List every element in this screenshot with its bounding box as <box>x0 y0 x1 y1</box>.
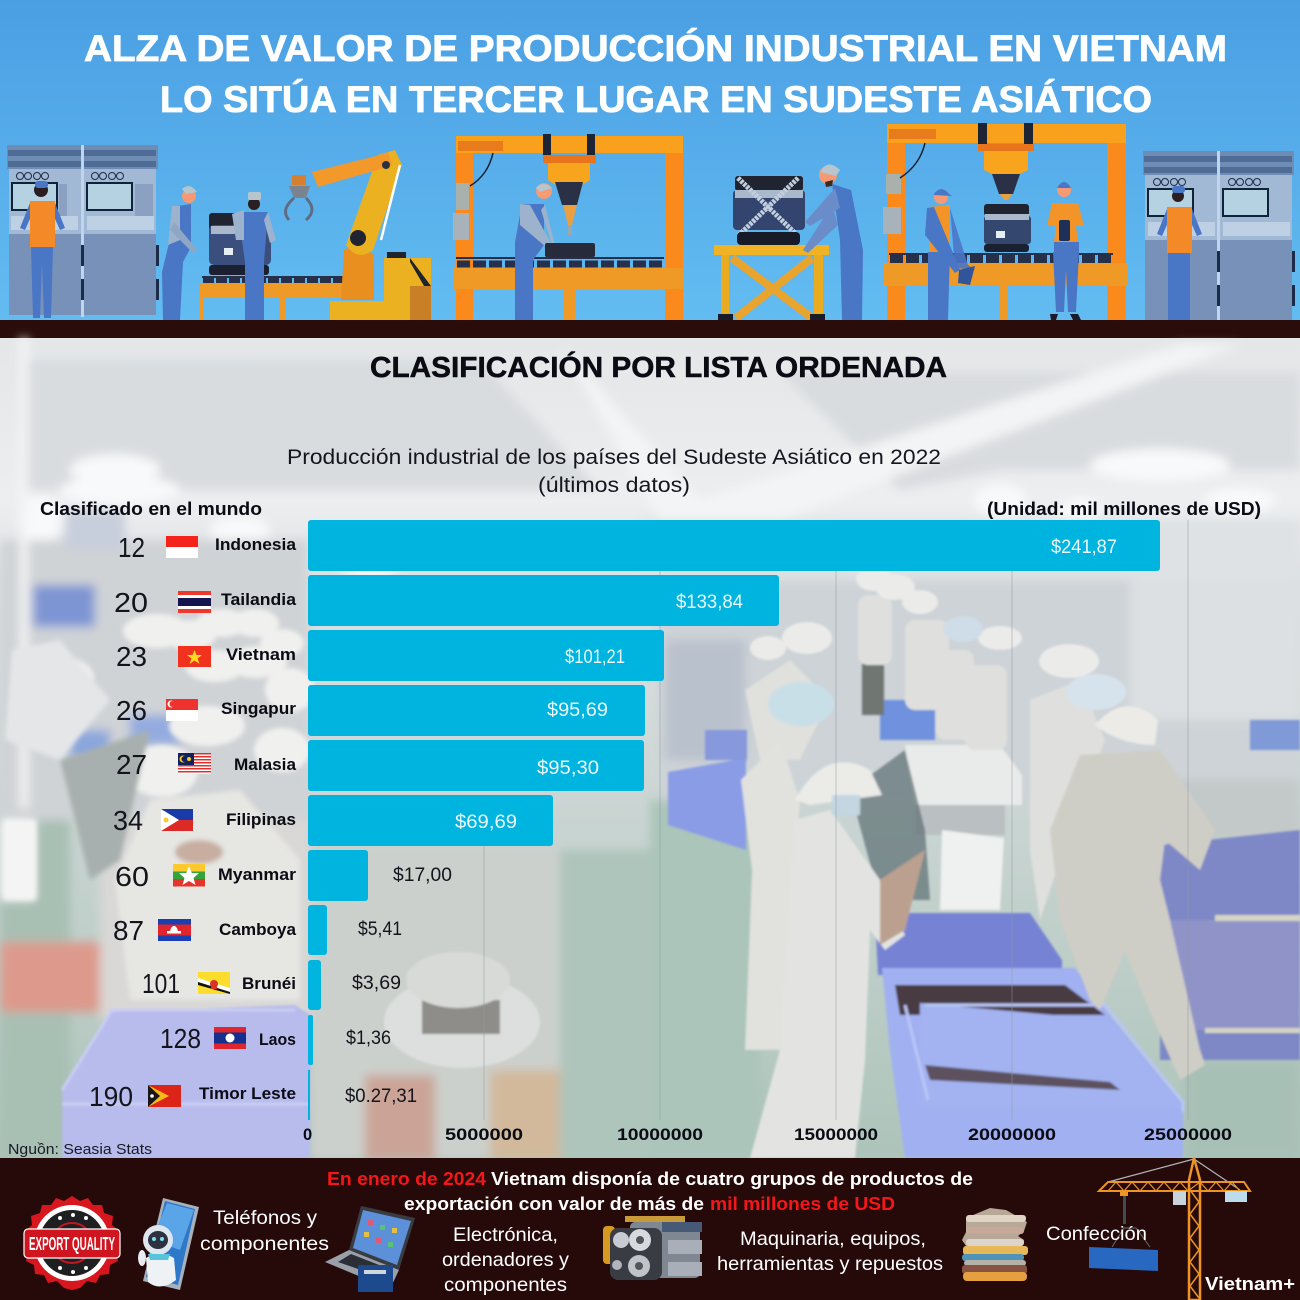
blue bins right <box>668 758 746 850</box>
upper right crowd backdrop <box>660 570 1300 800</box>
right worker <box>1050 750 1215 1080</box>
axis labels: 25000000 <box>1144 1126 1232 1144</box>
control panel right <box>1143 151 1295 321</box>
rank numbers: 20 <box>114 587 148 618</box>
label: electronics: componentes <box>444 1274 567 1296</box>
flag: Cambodia <box>158 919 191 941</box>
flag: Myanmar <box>173 864 205 886</box>
rank numbers: 26 <box>116 695 147 726</box>
worker with vest <box>925 189 975 320</box>
rank numbers: 128 <box>160 1023 201 1054</box>
country names: Tailandia <box>221 590 297 609</box>
axis labels: 10000000 <box>617 1126 703 1144</box>
logo: Vietnam+: Vietnam+ <box>1205 1274 1295 1294</box>
title: ALZA DE VALOR DE PRODUCCIÓN INDUSTRIAL EN VIETNAM <box>84 27 1227 69</box>
label: electronics: ordenadores y <box>442 1249 569 1271</box>
front worker <box>750 810 905 1158</box>
label: phones: Teléfonos y <box>213 1207 317 1229</box>
bar chart: $101,21 <box>565 647 625 668</box>
bar chart: $95,69 <box>547 700 608 721</box>
flag: Philippines <box>161 809 193 831</box>
heading: classification: CLASIFICACIÓN POR LISTA ORDENADA <box>370 350 947 384</box>
flag: Vietnam <box>178 646 211 667</box>
illustration: factory line <box>7 123 1295 321</box>
country names: Vietnam <box>226 645 296 664</box>
conveyor table 1 <box>199 276 364 320</box>
icon: laptop and board <box>325 1206 415 1292</box>
unit label: (Unidad: mil millones de USD) <box>987 499 1261 519</box>
bar chart: $5,41 <box>358 919 402 940</box>
label: electronics: Electrónica, <box>453 1224 558 1246</box>
left workers and machinery <box>0 540 308 820</box>
footer heading: exportación con valor de más de <box>404 1194 704 1214</box>
bar chart: $69,69 <box>455 812 517 833</box>
icon: stack of clothes <box>962 1208 1028 1281</box>
bar chart: $241,87 <box>1051 537 1117 558</box>
icon: phone with robot <box>138 1198 199 1290</box>
axis labels: 5000000 <box>445 1126 523 1144</box>
floor strip <box>0 320 1300 338</box>
chart: gridlines <box>484 520 1188 1120</box>
bar chart: $133,84 <box>676 592 743 613</box>
flag: Malaysia <box>178 753 211 774</box>
flag: Brunei <box>198 972 230 994</box>
ceiling shading <box>20 360 600 490</box>
gantry 2 <box>883 123 1128 320</box>
footer heading: mil millones de USD <box>710 1194 895 1214</box>
gantry 1 <box>453 134 684 320</box>
column label: world rank: Clasificado en el mundo <box>40 499 262 519</box>
robot arm <box>285 150 431 320</box>
flag: Thailand <box>178 591 211 613</box>
worker with tablet <box>1047 182 1084 320</box>
axis labels: 15000000 <box>794 1126 878 1144</box>
chart subtitle <box>287 446 941 497</box>
rank numbers <box>89 532 201 1112</box>
rank numbers: 27 <box>116 749 147 780</box>
label: machinery: Maquinaria, equipos, <box>740 1228 926 1250</box>
axis labels: 0 <box>303 1126 312 1144</box>
country names: Camboya <box>219 920 297 939</box>
country names <box>199 535 297 1103</box>
label: phones: componentes <box>200 1233 329 1255</box>
bar chart: $0.27,31 <box>345 1086 417 1107</box>
label: phones <box>200 1207 329 1255</box>
label: garments: Confección <box>1046 1223 1147 1245</box>
country names: Indonesia <box>215 535 297 554</box>
country names: Myanmar <box>218 865 296 884</box>
panel: header background <box>0 0 1300 321</box>
footer heading: En enero de 2024 <box>327 1169 486 1189</box>
bar chart: $1,36 <box>346 1028 391 1049</box>
engine on conveyor <box>209 213 271 275</box>
bar chart: $95,30 <box>537 758 599 779</box>
background photo: factory floor <box>0 338 1300 1160</box>
flag: Singapore <box>166 699 198 721</box>
flag: Timor Leste <box>148 1085 181 1107</box>
country names: Laos <box>259 1030 296 1049</box>
axis labels: 20000000 <box>968 1126 1056 1144</box>
country names: Timor Leste <box>199 1084 296 1103</box>
worker <box>162 186 197 320</box>
footer heading: Vietnam disponía de cuatro grupos de productos de <box>491 1169 973 1189</box>
flag: Indonesia <box>166 536 198 558</box>
worker at engine <box>232 192 276 320</box>
badge: export quality <box>23 1196 121 1290</box>
chart subtitle: (últimos datos) <box>538 474 690 497</box>
rank numbers: 12 <box>118 532 145 563</box>
mid machinery <box>310 850 560 1160</box>
panel: export footer <box>0 1158 1300 1300</box>
rank numbers: 60 <box>115 861 149 892</box>
rank numbers: 23 <box>116 641 147 672</box>
control panel left <box>7 145 159 318</box>
man with beard <box>803 164 863 320</box>
badge: export quality: EXPORT QUALITY <box>29 1234 115 1254</box>
side worker <box>741 740 800 1050</box>
rank numbers: 190 <box>89 1081 133 1112</box>
left crowd <box>4 609 315 1000</box>
worker at gantry 1 <box>515 183 595 320</box>
label: machinery: herramientas y repuestos <box>717 1253 943 1275</box>
label: electronics <box>442 1224 569 1296</box>
bar chart <box>308 520 1160 1120</box>
white machine <box>905 745 1022 805</box>
round tray <box>384 976 540 1068</box>
source: Nguồn: Seasia Stats <box>8 1141 152 1158</box>
footer heading <box>327 1169 973 1214</box>
flag: Laos <box>214 1027 246 1049</box>
rank numbers: 101 <box>142 968 180 999</box>
label: machinery <box>717 1228 943 1275</box>
country names: Singapur <box>221 699 296 718</box>
back crowd <box>858 595 1105 920</box>
table with chained engine <box>714 176 829 321</box>
chart subtitle: Producción industrial de los países del Sudeste Asiático en 2022 <box>287 446 941 469</box>
axis labels <box>303 1126 1232 1144</box>
country names: Malasia <box>234 755 297 774</box>
title <box>84 27 1227 120</box>
rank numbers: 87 <box>113 915 144 946</box>
icon: engine <box>603 1216 702 1280</box>
left blue tub <box>62 1005 310 1158</box>
icon: crane with container <box>1089 1158 1250 1300</box>
country names: Filipinas <box>226 810 296 829</box>
bar chart: $3,69 <box>352 973 401 994</box>
rank numbers: 34 <box>113 805 143 836</box>
bar chart: $17,00 <box>393 865 452 886</box>
title: LO SITÚA EN TERCER LUGAR EN SUDESTE ASIÁTICO <box>160 78 1152 120</box>
country names: Brunéi <box>242 974 296 993</box>
